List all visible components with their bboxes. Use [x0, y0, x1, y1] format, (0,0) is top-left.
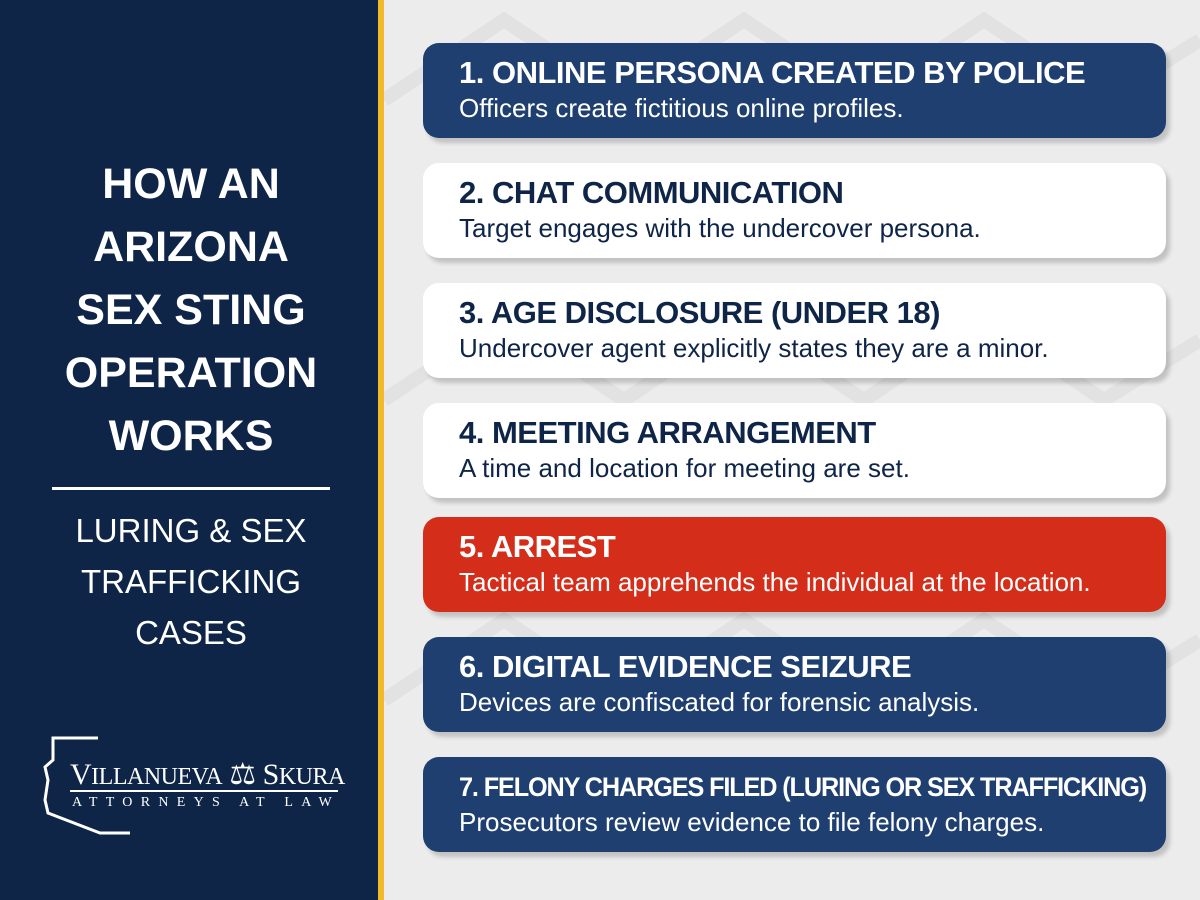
card 1: Officers create fictitious online profiles.: [459, 93, 904, 123]
card 3: 3. AGE DISCLOSURE (UNDER 18): [459, 295, 940, 330]
card 7: [423, 757, 1166, 852]
title: WORKS: [109, 412, 273, 460]
subtitle: TRAFFICKING: [81, 563, 301, 600]
background pattern: [384, 12, 1200, 706]
title: SEX STING: [76, 286, 306, 334]
card 6: 6. DIGITAL EVIDENCE SEIZURE: [459, 649, 911, 684]
card 2: [423, 163, 1166, 258]
card 2: Target engages with the undercover persona.: [459, 213, 981, 243]
card 6: [423, 637, 1166, 732]
subtitle: CASES: [135, 614, 247, 651]
title: ARIZONA: [93, 223, 289, 271]
card 1: 1. ONLINE PERSONA CREATED BY POLICE: [459, 55, 1085, 90]
card 3: [423, 283, 1166, 378]
card 4: [423, 403, 1166, 498]
title: OPERATION: [65, 349, 317, 397]
card 4: 4. MEETING ARRANGEMENT: [459, 415, 876, 450]
title: [65, 160, 317, 460]
subtitle: [75, 512, 307, 651]
card 4: A time and location for meeting are set.: [459, 453, 910, 483]
logo: VILLANUEVA ⚖ SKURA: [70, 758, 345, 791]
card 1: [423, 43, 1166, 138]
left panel: [0, 0, 378, 900]
card 3: Undercover agent explicitly states they are a minor.: [459, 333, 1049, 363]
subtitle: LURING & SEX: [75, 512, 307, 549]
card 7: 7. FELONY CHARGES FILED (LURING OR SEX TRAFFICKING): [459, 772, 1146, 802]
card 6: Devices are confiscated for forensic analysis.: [459, 687, 979, 717]
title: HOW AN: [102, 160, 280, 208]
card 2: 2. CHAT COMMUNICATION: [459, 175, 843, 210]
logo: ATTORNEYS AT LAW: [72, 795, 340, 810]
card 5: [423, 517, 1166, 612]
card 5: Tactical team apprehends the individual at the location.: [459, 567, 1091, 597]
card 7: Prosecutors review evidence to file felony charges.: [459, 807, 1044, 837]
card 5: 5. ARREST: [459, 529, 615, 564]
logo: [43, 736, 346, 834]
